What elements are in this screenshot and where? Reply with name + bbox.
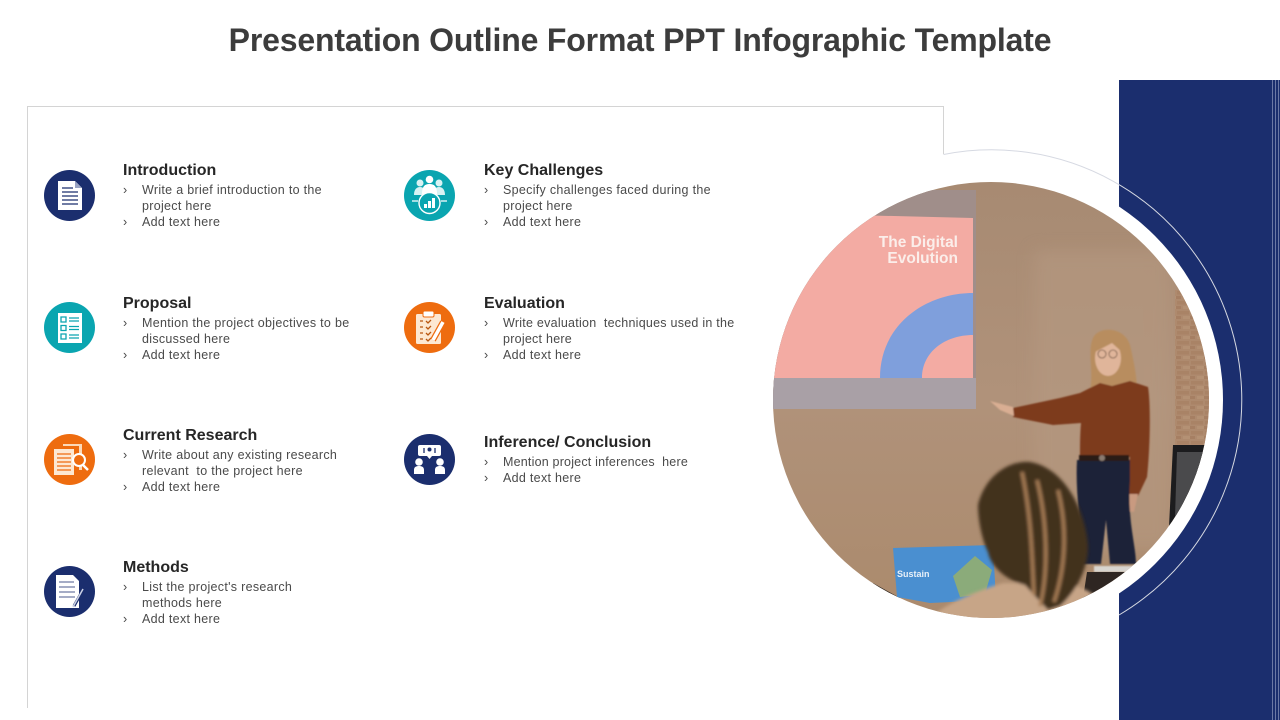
laptop: Sustain bbox=[897, 569, 930, 579]
icon: clipboard bbox=[404, 302, 455, 353]
bullet text: › bbox=[123, 612, 127, 626]
bullet text: › bbox=[123, 316, 127, 330]
white ring bbox=[759, 168, 1223, 632]
title: Presentation Outline Format PPT Infographic Template bbox=[229, 22, 1051, 58]
wall tone bbox=[1106, 252, 1171, 548]
brick wall bbox=[1175, 290, 1211, 446]
bullet text: › bbox=[123, 183, 127, 197]
bullet text bbox=[123, 316, 349, 346]
bullet text: Add text here bbox=[503, 471, 581, 485]
bullet text: › bbox=[484, 316, 488, 330]
bullet text: › bbox=[123, 580, 127, 594]
bullet text: project here bbox=[503, 332, 572, 346]
bullet text: › bbox=[484, 471, 488, 485]
bullet text bbox=[123, 183, 322, 213]
bullet text: › bbox=[484, 215, 488, 229]
icon: research documents bbox=[44, 434, 95, 485]
photo content bbox=[770, 180, 1212, 622]
heading: Methods bbox=[123, 559, 189, 576]
bullet text: Write about any existing research bbox=[142, 448, 337, 462]
projected slide: The Digital bbox=[879, 234, 958, 251]
icon: document with pen bbox=[44, 566, 95, 617]
bullet text: Add text here bbox=[503, 215, 581, 229]
bullet text: › bbox=[484, 455, 488, 469]
icon: document bbox=[44, 170, 95, 221]
panel: Introduction bbox=[44, 162, 322, 229]
bullet text: Write a brief introduction to the bbox=[142, 183, 322, 197]
bullet text bbox=[484, 183, 711, 213]
bullet text: methods here bbox=[142, 596, 222, 610]
audience member bbox=[928, 462, 1097, 622]
bullet text bbox=[484, 316, 734, 346]
panel: Current Research bbox=[44, 427, 337, 494]
bullet text: Add text here bbox=[503, 348, 581, 362]
bullet text: Add text here bbox=[142, 215, 220, 229]
heading: Inference/ Conclusion bbox=[484, 434, 651, 451]
presenter bbox=[990, 330, 1150, 572]
icon: team and chart bbox=[404, 170, 455, 221]
projected slide bbox=[770, 190, 976, 409]
bullet text: Add text here bbox=[142, 348, 220, 362]
bullet text: discussed here bbox=[142, 332, 230, 346]
navy side panel bbox=[1119, 80, 1280, 720]
bullet text bbox=[123, 448, 337, 478]
projected slide: Evolution bbox=[887, 250, 958, 267]
thin outer ring arc bbox=[944, 150, 1242, 615]
bullet text: › bbox=[123, 448, 127, 462]
bullet text: relevant to the project here bbox=[142, 464, 303, 478]
bullet text: Specify challenges faced during the bbox=[503, 183, 711, 197]
bullet text bbox=[123, 580, 292, 610]
heading: Current Research bbox=[123, 427, 257, 444]
panel: Proposal bbox=[44, 295, 349, 362]
photo: presenter in a circular frame with rings bbox=[773, 149, 1242, 618]
bullet text: Add text here bbox=[142, 612, 220, 626]
bullet text: project here bbox=[503, 199, 573, 213]
bullet text: List the project's research bbox=[142, 580, 292, 594]
icon: people discussing bbox=[404, 434, 455, 485]
laptop bbox=[893, 545, 996, 603]
icon: checklist bbox=[44, 302, 95, 353]
heading: Introduction bbox=[123, 162, 216, 179]
heading: Proposal bbox=[123, 295, 191, 312]
panel: Key Challenges bbox=[404, 162, 711, 229]
bullet text: project here bbox=[142, 199, 212, 213]
heading: Evaluation bbox=[484, 295, 565, 312]
bullet text: Add text here bbox=[142, 480, 220, 494]
panel: Methods bbox=[44, 559, 292, 626]
bullet text: Mention project inferences here bbox=[503, 455, 688, 469]
monitor bbox=[1169, 445, 1204, 526]
bullet text: Mention the project objectives to be bbox=[142, 316, 349, 330]
heading: Key Challenges bbox=[484, 162, 603, 179]
panel: Inference/ Conclusion bbox=[404, 434, 688, 485]
bullet text: › bbox=[484, 183, 488, 197]
bullet text: Write evaluation techniques used in the bbox=[503, 316, 734, 330]
bullet text: › bbox=[484, 348, 488, 362]
panel: Evaluation bbox=[404, 295, 734, 362]
bullet text: › bbox=[123, 348, 127, 362]
bullet text: › bbox=[123, 480, 127, 494]
bullet text: › bbox=[123, 215, 127, 229]
